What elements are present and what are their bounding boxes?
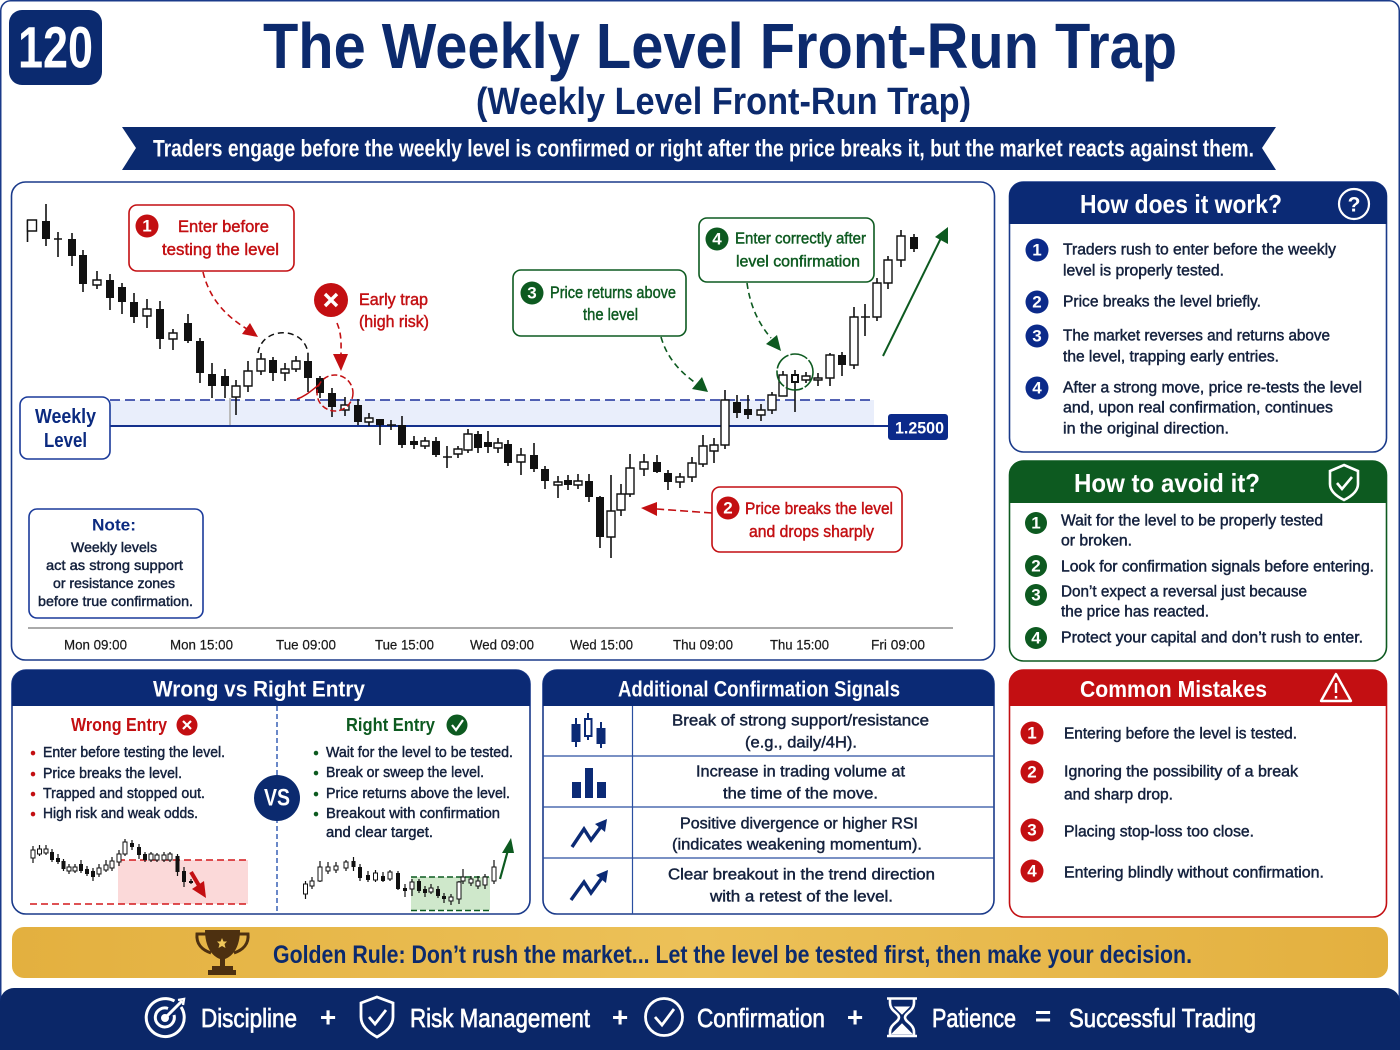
heading: Common Mistakes — [1080, 676, 1267, 702]
callout 3: price returns: Price returns above — [550, 284, 676, 302]
arrow: callout 4 to entry — [747, 283, 781, 351]
mistake 2 — [1020, 760, 1298, 804]
heading: Wrong vs Right Entry — [153, 676, 366, 702]
heading: How to avoid it? — [1074, 468, 1260, 498]
tip 1: Wait for the level to be properly tested — [1061, 512, 1323, 530]
golden rule banner: Golden Rule: Don’t rush the market... Let the level be tested first, then make your decision. — [273, 941, 1192, 969]
discipline: Discipline — [201, 1003, 297, 1033]
patience: Patience — [932, 1003, 1016, 1033]
icon: question mark: ? — [1348, 194, 1360, 216]
plus: + — [320, 1002, 336, 1032]
tip 1 — [1025, 512, 1323, 550]
column: right entry — [316, 714, 513, 841]
callout 1: enter before testing: testing the level — [162, 241, 279, 259]
icon: warning — [1321, 674, 1351, 701]
tip 2: 2 — [1031, 556, 1041, 576]
tip 4 — [1025, 627, 1363, 649]
step 2: 2 — [1032, 292, 1042, 312]
callout 4: enter correctly: Enter correctly after — [735, 230, 867, 248]
callout 1: enter before testing — [129, 205, 294, 271]
row 2: Increase in trading volume at — [696, 764, 906, 780]
time axis: Thu 15:00 — [770, 638, 829, 652]
step 1: 1 — [1032, 240, 1042, 260]
icon: breakout — [571, 870, 608, 900]
column: right entry: Break or sweep the level. — [326, 765, 484, 781]
tip 1: 1 — [1031, 514, 1041, 532]
step 1 — [1026, 238, 1336, 280]
time axis: Mon 09:00 — [64, 638, 127, 652]
mistake 3: Placing stop-loss too close. — [1064, 824, 1254, 840]
icon: volume bars — [572, 768, 606, 798]
row 1 — [572, 712, 929, 752]
confirmation: Confirmation — [697, 1003, 825, 1033]
callout 1: enter before testing: Enter before — [178, 218, 269, 236]
early trap marker — [314, 283, 429, 331]
price tag 1.2500: 1.2500 — [895, 418, 944, 438]
title: The Weekly Level Front-Run Trap — [263, 10, 1177, 82]
column: right entry: Right Entry — [346, 715, 435, 735]
icon: question mark — [1339, 189, 1369, 219]
panel: additional confirmation signals — [543, 670, 994, 914]
badge: 120: 120 — [18, 16, 93, 80]
row 3: (indicates weakening momentum). — [672, 836, 922, 854]
time axis: Thu 09:00 — [673, 638, 733, 652]
row 3: Positive divergence or higher RSI — [680, 816, 918, 832]
panel: common mistakes — [1009, 670, 1387, 917]
column: right entry: Breakout with confirmation — [326, 806, 500, 822]
bottom bar — [0, 988, 1400, 1050]
entry circle — [777, 354, 813, 390]
callout 2: price breaks: Price breaks the level — [745, 500, 893, 518]
callout 3: price returns: the level — [583, 306, 638, 324]
column: wrong entry: Price breaks the level. — [43, 766, 182, 782]
column: wrong entry: Enter before testing the level. — [43, 745, 225, 761]
tip 3: 3 — [1031, 586, 1041, 604]
time axis: Tue 09:00 — [276, 638, 336, 652]
banner ribbon — [122, 127, 1276, 170]
time axis: Wed 15:00 — [570, 638, 633, 652]
step 3: 3 — [1032, 326, 1042, 346]
step 2 — [1026, 290, 1261, 314]
early trap marker: Early trap — [359, 291, 428, 309]
early trap marker: (high risk) — [359, 313, 429, 331]
column: right entry: Wait for the level to be tested. — [326, 745, 513, 761]
successful trading: Successful Trading — [1069, 1003, 1256, 1033]
note box: act as strong support — [46, 557, 183, 573]
icon: trophy — [197, 930, 248, 975]
row 3 — [572, 816, 922, 854]
mistake 2: Ignoring the possibility of a break — [1064, 764, 1298, 780]
step 4: 4 — [1032, 378, 1042, 398]
callout 3: price returns — [513, 270, 686, 336]
callout 3: price returns: 3 — [527, 284, 537, 302]
icon: trend up — [572, 819, 607, 847]
note box — [29, 509, 203, 618]
callout 2: price breaks: and drops sharply — [749, 523, 875, 541]
plus: + — [847, 1002, 863, 1032]
step 4: After a strong move, price re-tests the level — [1063, 380, 1362, 396]
uptrend arrow — [883, 227, 948, 356]
panel: how does it work — [1009, 182, 1387, 452]
trap circle — [297, 375, 353, 411]
weekly level label — [20, 397, 110, 459]
column: wrong entry: Trapped and stopped out. — [43, 786, 205, 802]
equals: = — [1035, 1000, 1051, 1032]
tip 1: or broken. — [1061, 532, 1132, 550]
weekly level label: Level — [44, 430, 87, 452]
arrow: callout 3 to level — [661, 337, 708, 392]
time axis: Tue 15:00 — [375, 638, 434, 652]
row 4: with a retest of the level. — [709, 888, 893, 906]
plus: + — [612, 1002, 628, 1032]
panel: how to avoid it — [1009, 461, 1387, 661]
callout 2: price breaks — [712, 487, 902, 552]
weekly level label: Weekly — [35, 406, 97, 428]
vs badge: VS — [264, 784, 290, 812]
arrow: early trap to candle — [333, 323, 348, 371]
step 1: Traders rush to enter before the weekly — [1063, 242, 1336, 258]
mini chart: wrong entry — [30, 839, 248, 904]
note box: Weekly levels — [71, 539, 157, 555]
mini chart: right entry — [304, 838, 514, 910]
tip 2: Look for confirmation signals before entering. — [1061, 558, 1374, 576]
arrow: callout 2 to drop — [641, 502, 712, 516]
column: wrong entry: Wrong Entry — [71, 715, 167, 735]
time axis — [28, 628, 953, 652]
mistake 1 — [1020, 722, 1297, 744]
row 4 — [571, 866, 935, 906]
note box: Note: — [92, 516, 136, 534]
tip 4: Protect your capital and don’t rush to enter. — [1061, 630, 1363, 646]
arrow: callout 1 to consolidation — [203, 272, 258, 337]
icon: check circle — [646, 998, 682, 1036]
heading: How does it work? — [1080, 189, 1282, 219]
step 3: The market reverses and returns above — [1063, 328, 1330, 344]
column: wrong entry — [33, 714, 225, 822]
icon: candles — [572, 713, 604, 748]
golden rule banner — [12, 927, 1388, 978]
mistake 3 — [1020, 818, 1254, 842]
icon: target — [146, 999, 184, 1037]
heading: Additional Confirmation Signals — [618, 676, 900, 702]
time axis: Fri 09:00 — [871, 638, 925, 652]
icon: shield — [1330, 465, 1358, 500]
note box: before true confirmation. — [38, 593, 193, 609]
time axis: Mon 15:00 — [170, 638, 233, 652]
panel: wrong vs right entry — [12, 670, 530, 914]
note box: or resistance zones — [53, 575, 175, 591]
subtitle: (Weekly Level Front-Run Trap) — [476, 81, 971, 123]
time axis: Wed 09:00 — [470, 638, 534, 652]
mistake 3: 3 — [1027, 820, 1037, 840]
mistake 4: 4 — [1027, 862, 1037, 880]
vs badge — [254, 775, 300, 821]
mistake 1: Entering before the level is tested. — [1064, 726, 1297, 742]
row 1: (e.g., daily/4H). — [745, 734, 857, 752]
step 4: and, upon real confirmation, continues — [1063, 400, 1333, 416]
row 2: the time of the move. — [723, 786, 878, 802]
badge: 120 — [9, 10, 102, 85]
callout 4: enter correctly — [699, 218, 874, 282]
dashed arc over consolidation — [258, 333, 308, 353]
tip 4: 4 — [1031, 628, 1041, 648]
row 2 — [572, 764, 906, 802]
mistake 2: 2 — [1027, 762, 1037, 782]
callout 4: enter correctly: level confirmation — [736, 254, 860, 270]
callout 1: enter before testing: 1 — [142, 216, 152, 236]
tip 3 — [1025, 584, 1307, 620]
column: right entry: and clear target. — [326, 825, 433, 841]
callout 4: enter correctly: 4 — [712, 230, 722, 248]
callout 2: price breaks: 2 — [723, 498, 733, 518]
step 2: Price breaks the level briefly. — [1063, 294, 1261, 310]
weekly level zone — [110, 400, 890, 426]
panel: main chart — [12, 182, 994, 660]
step 3 — [1026, 324, 1330, 366]
mistake 2: and sharp drop. — [1064, 786, 1173, 804]
mistake 4 — [1020, 860, 1324, 882]
column: right entry: Price returns above the level. — [326, 786, 510, 802]
candlestick chart — [28, 204, 918, 558]
step 1: level is properly tested. — [1063, 262, 1224, 280]
risk management: Risk Management — [410, 1003, 591, 1033]
column: wrong entry: High risk and weak odds. — [43, 806, 198, 822]
step 4: in the original direction. — [1063, 420, 1229, 438]
tip 3: Don’t expect a reversal just because — [1061, 584, 1307, 600]
row 1: Break of strong support/resistance — [672, 712, 929, 730]
mistake 4: Entering blindly without confirmation. — [1064, 864, 1324, 882]
icon: shield — [361, 997, 393, 1037]
mistake 1: 1 — [1027, 724, 1037, 742]
price tag 1.2500 — [888, 414, 948, 440]
row 4: Clear breakout in the trend direction — [668, 866, 935, 884]
tip 3: the price has reacted. — [1061, 604, 1209, 620]
step 3: the level, trapping early entries. — [1063, 348, 1279, 366]
step 4 — [1026, 376, 1362, 438]
icon: hourglass — [887, 998, 917, 1036]
tip 2 — [1025, 555, 1374, 577]
